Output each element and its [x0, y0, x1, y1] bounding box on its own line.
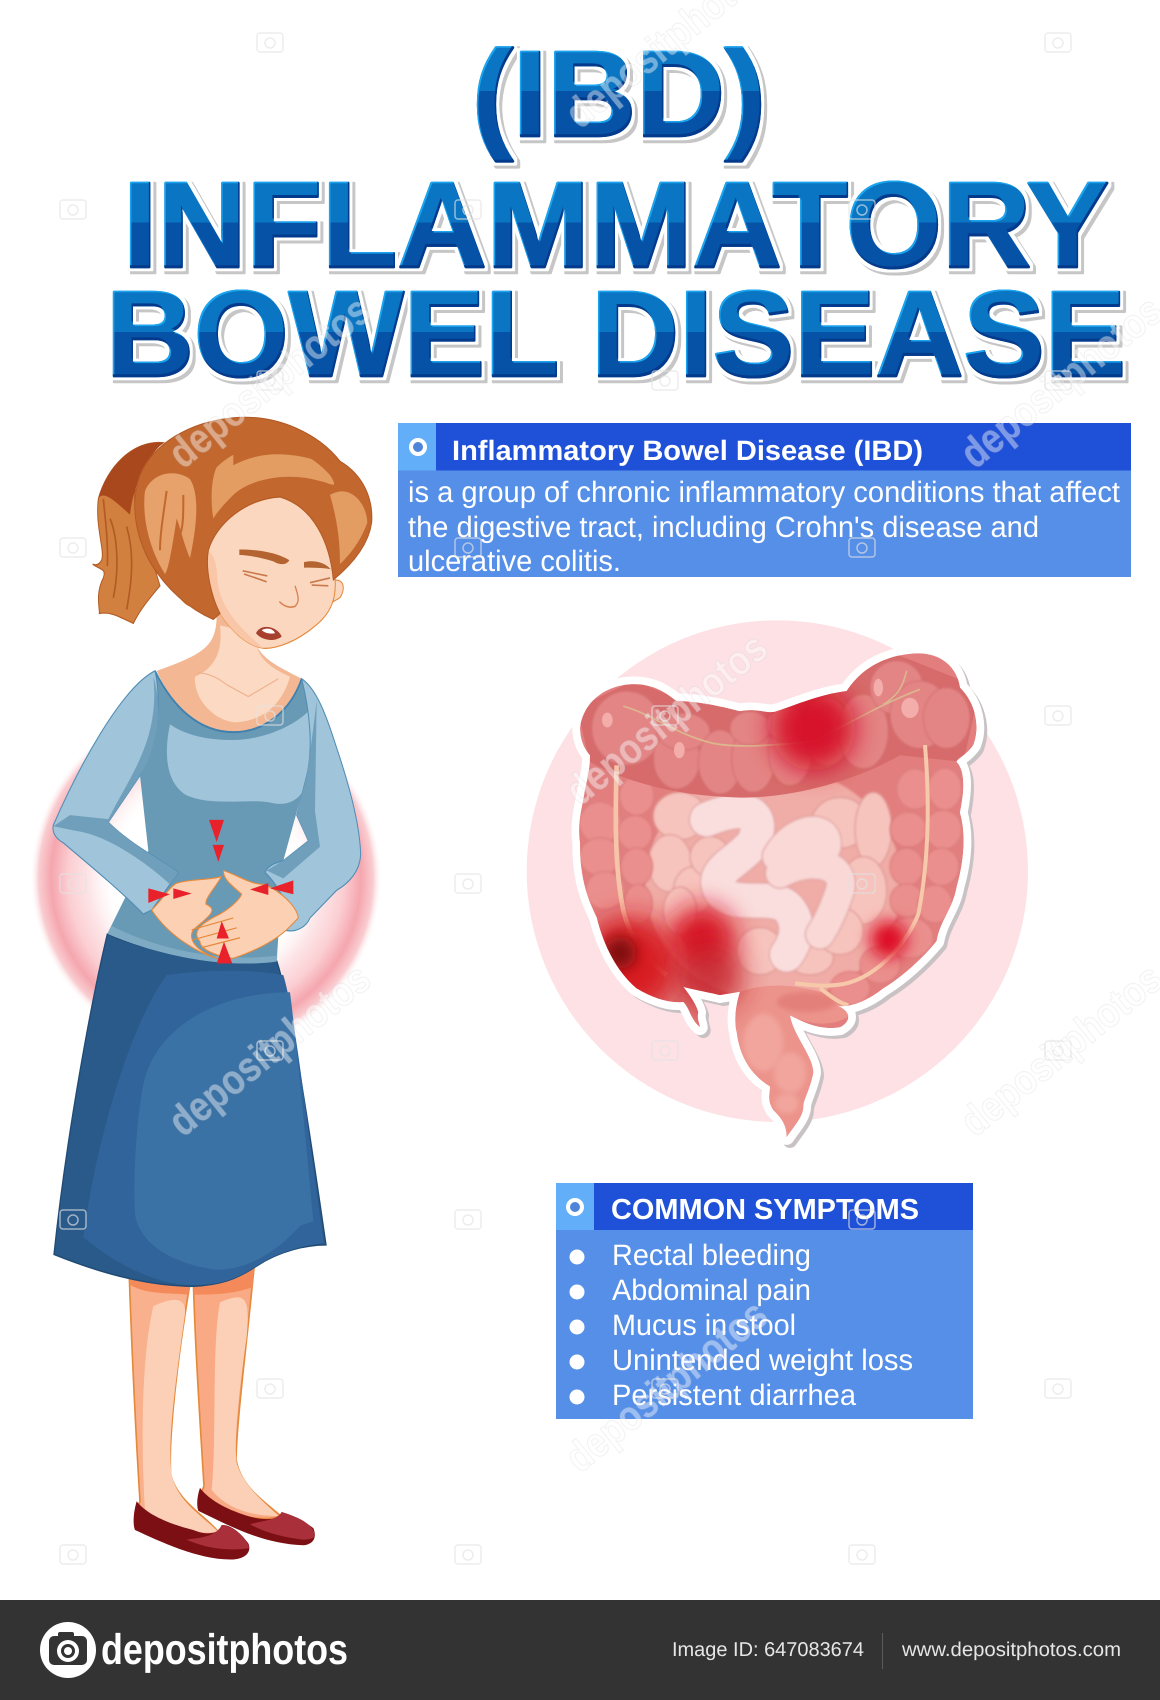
panel body text: is a group of chronic inflammatory conditions that affect [408, 476, 1120, 509]
panel body text [408, 476, 1120, 578]
watermark text: depositphotos [159, 954, 379, 1145]
watermark text: depositphotos [556, 1290, 776, 1481]
left sleeve [53, 671, 178, 914]
panel body text: ulcerative colitis. [408, 545, 621, 578]
panel body text: the digestive tract, including Crohn's disease and [408, 511, 1039, 544]
right sleeve [265, 679, 361, 931]
colon vessels [616, 671, 928, 1005]
title [106, 26, 1126, 402]
symptom list: Abdominal pain [612, 1274, 811, 1307]
upper body [53, 417, 372, 964]
symptom bullets [570, 1250, 584, 1404]
skirt [54, 934, 326, 1286]
title line: BOWEL DISEASE: BOWEL DISEASE [106, 266, 1126, 402]
title line: INFLAMMATORY: INFLAMMATORY [123, 157, 1109, 293]
hair [135, 417, 372, 619]
legs [129, 1268, 282, 1536]
panel heading: COMMON SYMPTOMS [611, 1194, 919, 1226]
intestine body [577, 650, 980, 1137]
symptom list: Unintended weight loss [612, 1344, 913, 1377]
ascending and descending colon [579, 768, 962, 1005]
symptom list: Persistent diarrhea [612, 1379, 857, 1412]
icon: panel bullet ring [556, 1183, 594, 1230]
shoes [134, 1488, 315, 1560]
hands [152, 871, 298, 958]
panel heading: Inflammatory Bowel Disease (IBD) [452, 435, 923, 466]
illustration: inflamed intestine on pink circle [527, 620, 1028, 1141]
watermark cameras [60, 33, 1071, 1564]
symptom list: Rectal bleeding [612, 1239, 811, 1272]
website: www.depositphotos.com [901, 1639, 1121, 1661]
pain glow ring [30, 702, 382, 1054]
face and ear [170, 497, 343, 648]
symptom list [612, 1239, 913, 1412]
small intestine [645, 767, 902, 1000]
image id: Image ID: 647083674 [672, 1639, 864, 1661]
neck and chest [155, 614, 302, 732]
brand name: depositphotos [101, 1626, 348, 1674]
watermark text: depositphotos [556, 623, 776, 814]
shirt torso [107, 671, 317, 964]
title line: (IBD): (IBD) [472, 26, 766, 162]
facial features [197, 549, 331, 697]
lower body [54, 934, 326, 1560]
pink background circle [527, 620, 1028, 1122]
watermark text [159, 0, 1160, 1481]
icon: panel bullet ring [398, 423, 436, 470]
info panel: definition of IBD [398, 423, 1131, 578]
pain arrows [148, 820, 293, 963]
inflamed spots [583, 686, 907, 1012]
rectum [735, 986, 853, 1137]
watermark text: depositphotos [159, 286, 379, 477]
ponytail [93, 442, 163, 623]
symptom list: Mucus in stool [612, 1309, 796, 1342]
info panel: common symptoms [556, 1183, 973, 1419]
icon: camera logo [40, 1622, 96, 1678]
illustration: woman with abdominal pain [30, 417, 382, 1560]
transverse colon [577, 650, 980, 798]
sticker outline [579, 653, 980, 1141]
footer bar [0, 1600, 1160, 1700]
